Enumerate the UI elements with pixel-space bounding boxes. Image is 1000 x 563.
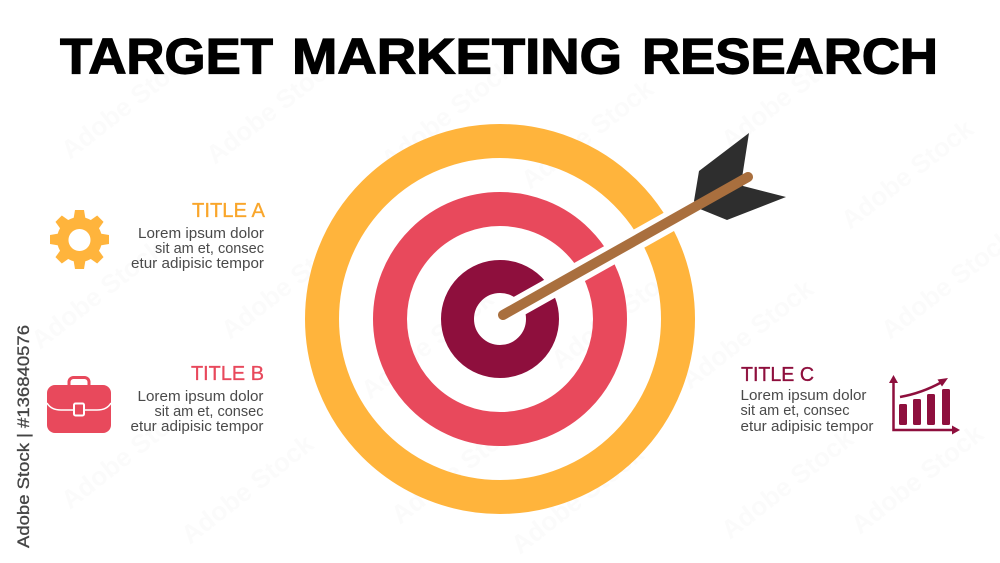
watermark pattern: Adobe Stock: [715, 33, 859, 155]
icon: briefcase: [47, 378, 111, 433]
text C: [740, 388, 874, 435]
title: RESEARCH: [642, 29, 938, 85]
text A: etur adipisic tempor: [131, 256, 264, 272]
text B: Lorem ipsum dolor: [138, 389, 264, 405]
text C: sit am et, consec: [740, 403, 850, 419]
watermark pattern: Adobe Stock: [715, 423, 859, 545]
watermark pattern: Adobe Stock: [175, 428, 319, 550]
target chart: [322, 141, 690, 497]
text B: etur adipisic tempor: [130, 419, 264, 435]
heading A: TITLE A: [192, 200, 266, 222]
text A: [131, 226, 264, 272]
block: title A: [131, 200, 266, 272]
watermark pattern: Adobe Stock: [675, 273, 819, 395]
arrow shaft: [503, 177, 748, 315]
watermark pattern: Adobe Stock: [385, 408, 529, 530]
heading C: TITLE C: [741, 364, 814, 386]
watermark pattern: Adobe Stock: [505, 438, 649, 560]
icon: gear: [50, 210, 109, 269]
arrow fletching: [694, 133, 786, 220]
watermark pattern: Adobe Stock: [545, 253, 689, 375]
middle red ring: [390, 209, 610, 429]
title: TARGET: [60, 29, 273, 85]
icon: growth chart: [889, 375, 960, 434]
watermark pattern: Adobe Stock: [355, 283, 499, 405]
heading B: TITLE B: [191, 363, 264, 385]
text C: etur adipisic tempor: [740, 419, 874, 435]
arrow: [503, 133, 786, 315]
text A: Lorem ipsum dolor: [138, 226, 264, 242]
text A: sit am et, consec: [155, 241, 264, 257]
title: MARKETING: [292, 29, 622, 85]
text C: Lorem ipsum dolor: [740, 388, 867, 404]
watermark pattern: Adobe Stock: [55, 43, 199, 165]
inner crimson ring: [458, 276, 542, 362]
watermark pattern: Adobe Stock: [55, 393, 199, 515]
block: title B: [130, 363, 264, 435]
watermark pattern: Adobe Stock: [835, 113, 979, 235]
text B: [130, 389, 264, 435]
text B: sit am et, consec: [154, 404, 264, 420]
watermark pattern: Adobe Stock: [25, 233, 169, 355]
watermark pattern: Adobe Stock: [200, 48, 344, 170]
watermark pattern: Adobe Stock: [375, 53, 519, 175]
watermark id: Adobe Stock | #136840576: [14, 325, 33, 548]
block: title C: [740, 364, 874, 435]
watermark pattern: Adobe Stock: [515, 73, 659, 195]
watermark pattern: Adobe Stock: [845, 418, 989, 540]
watermark pattern: Adobe Stock: [215, 223, 359, 345]
outer yellow ring: [322, 141, 678, 497]
title: [60, 29, 938, 85]
white gap behind arrow: [503, 210, 690, 315]
